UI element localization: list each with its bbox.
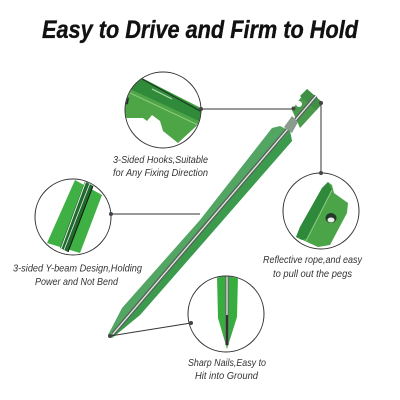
nail caption [188,357,266,382]
callout: hooks [113,72,296,179]
callout: Y-beam [13,179,200,288]
rope leader dots [319,101,323,175]
hooks caption [113,154,208,179]
hooks circle outline [125,72,201,148]
hooks leader line [201,108,294,110]
stake head [292,89,323,128]
Y-beam caption [13,262,142,288]
nail caption: Hit into Ground [195,370,259,382]
rope caption: Reflective rope,and easy [263,254,363,266]
nail circle outline [188,276,264,352]
tent stake [108,89,323,338]
rope caption: to pull out the pegs [273,268,353,280]
hooks caption: 3-Sided Hooks,Suitable [113,154,208,166]
stake body [108,126,292,338]
Y-beam circle outline [35,179,111,255]
Y-beam magnified view [47,180,102,253]
hooks leader dots [199,106,296,111]
hooks caption: for Any Fixing Direction [113,167,208,179]
Y-beam caption: 3-sided Y-beam Design,Holding [13,262,142,274]
rope hole [296,101,302,107]
rope circle outline [283,173,359,249]
stake centre ridge [113,96,316,334]
callout: sharp nails [108,276,266,382]
rope caption [263,254,363,280]
rope peg magnified view [296,182,348,247]
nail leader dots [108,321,193,338]
title: Easy to Drive and Firm to Hold [42,16,359,44]
nail caption: Sharp Nails,Easy to [188,357,266,369]
callout: reflective rope [263,101,363,280]
nail magnified view [217,276,238,349]
hooks magnified view [126,78,200,143]
Y-beam caption: Power and Not Bend [35,276,119,288]
stake neck [284,116,298,133]
Y-beam leader line [111,213,200,215]
Y-beam leader dot [109,212,113,216]
rope leader line [320,103,322,173]
nail leader line [110,323,191,336]
